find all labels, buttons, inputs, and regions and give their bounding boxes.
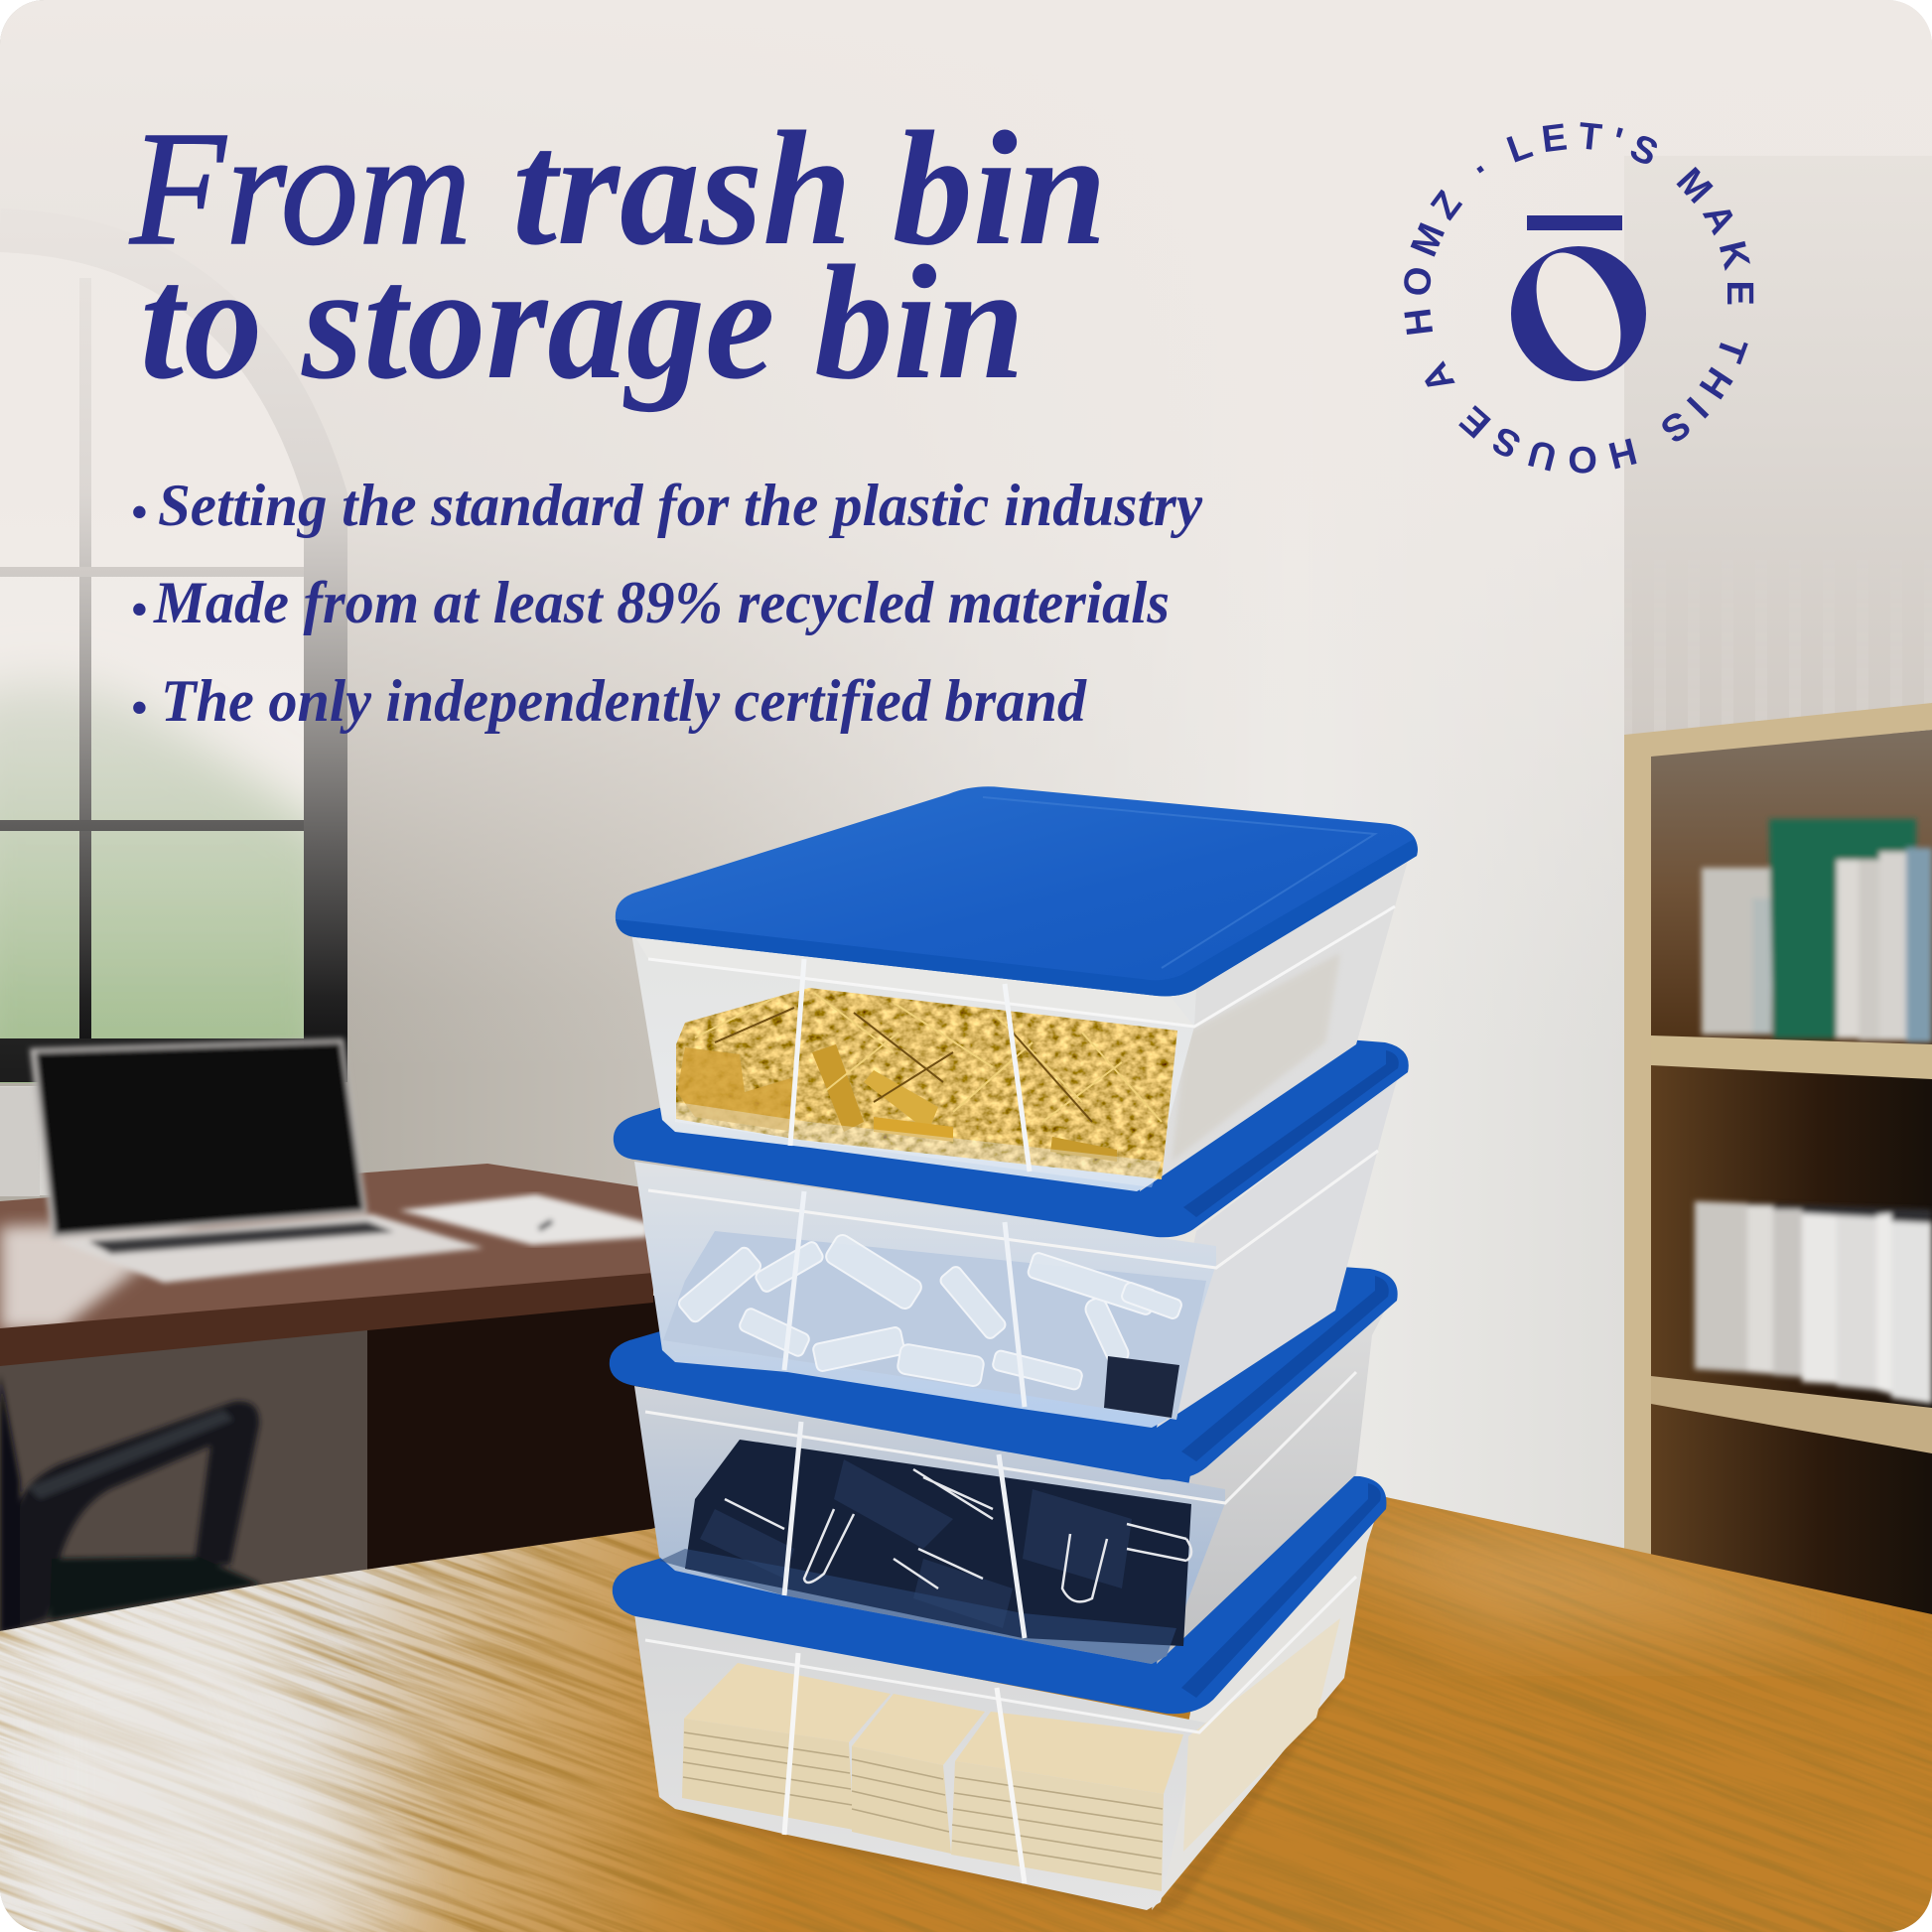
bullet: certified: The only independently certified brand bbox=[161, 668, 1087, 734]
laptop bbox=[30, 1038, 483, 1283]
bin side bbox=[1157, 1077, 1398, 1428]
bin lid bbox=[614, 1013, 1409, 1237]
books: top shelf bbox=[1702, 819, 1932, 1042]
under-desk wall bbox=[0, 1330, 369, 1648]
circular slogan: LET'S MAKE THIS HOUSE A HOMZ · bbox=[1404, 122, 1753, 474]
card stack B bbox=[852, 1694, 985, 1765]
office desk bbox=[0, 1087, 660, 1648]
rim band and dividers bbox=[635, 937, 1194, 1027]
office chair bbox=[0, 1374, 261, 1633]
rim and dividers bbox=[645, 1577, 1356, 1732]
bin front bbox=[634, 1613, 1205, 1910]
bullet: standard: Setting the standard for the plastic industry bbox=[158, 473, 1202, 538]
card stack C bbox=[955, 1712, 1183, 1794]
logo ring mark bbox=[1511, 239, 1646, 384]
bin lid bbox=[613, 1466, 1386, 1714]
wooden table bbox=[0, 1489, 1932, 1932]
clear clips contents bbox=[663, 1231, 1206, 1420]
bullet: certified: • bbox=[131, 682, 147, 733]
title bbox=[129, 97, 1107, 413]
bin front bbox=[634, 1386, 1225, 1664]
bin 1: gold clips bbox=[616, 786, 1418, 1191]
title: to storage bin bbox=[140, 231, 1025, 413]
title: trash bin bbox=[512, 97, 1107, 279]
window with arched frame bbox=[0, 382, 347, 1195]
bin 2: clear clips bbox=[614, 1013, 1409, 1428]
recessed wall behind shelf bbox=[1624, 171, 1932, 735]
bullet: standard: • bbox=[131, 486, 147, 537]
bin side bbox=[1140, 854, 1410, 1191]
see-through contents on side bbox=[1172, 953, 1340, 1162]
gold clips contents bbox=[670, 983, 1186, 1186]
bookshelf bbox=[1624, 703, 1932, 1638]
notebook with pen bbox=[399, 1194, 649, 1245]
bin front bbox=[634, 1162, 1216, 1428]
bin lid bbox=[616, 786, 1418, 996]
cards side view bbox=[1183, 1618, 1340, 1852]
desk front edge bbox=[0, 1273, 653, 1366]
desk cabinet bbox=[367, 1296, 660, 1584]
logo bar bbox=[1527, 215, 1622, 230]
bin 4: index cards bbox=[613, 1466, 1386, 1918]
bullet list bbox=[131, 473, 1202, 734]
table shadow bbox=[645, 1678, 1340, 1918]
logo badge bbox=[1404, 122, 1753, 474]
storage bin stack bbox=[610, 786, 1418, 1918]
window sill bbox=[0, 1087, 40, 1196]
bin side bbox=[1152, 1519, 1375, 1910]
bullet: recycled: Made from at least 89% recycled materials bbox=[153, 570, 1170, 635]
dark clips bbox=[685, 1440, 1191, 1646]
bin 3: black binder clips bbox=[610, 1242, 1398, 1664]
title: From bbox=[129, 97, 472, 279]
soft top fade for heading legibility bbox=[0, 0, 1932, 1072]
rim and dividers bbox=[645, 1372, 1356, 1503]
bin front bbox=[631, 933, 1196, 1191]
shelf frame boards bbox=[1624, 703, 1932, 1588]
bullet: recycled: • bbox=[131, 584, 147, 634]
desk surface bbox=[0, 1164, 653, 1330]
bin lid bbox=[610, 1242, 1398, 1479]
bin side bbox=[1157, 1311, 1385, 1664]
books: middle shelf bbox=[1695, 1201, 1932, 1404]
rim and dividers bbox=[648, 1151, 1378, 1268]
wire handles bbox=[725, 1469, 1191, 1601]
card stack A bbox=[684, 1663, 891, 1742]
